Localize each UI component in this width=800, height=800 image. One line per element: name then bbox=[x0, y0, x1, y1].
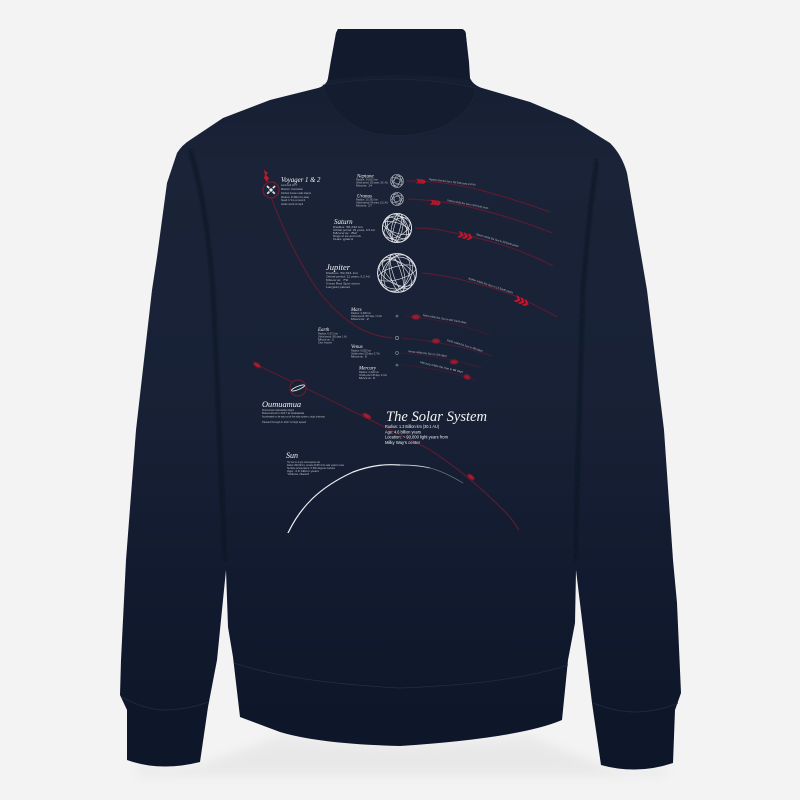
planet: Neptune bbox=[356, 173, 476, 189]
orbit caption: Mercury: Mercury orbits the Sun in 88 days bbox=[420, 360, 464, 374]
orbit caption: Earth: Earth orbits the Sun in 365 days bbox=[447, 338, 484, 353]
text: Saturn: Moons: 82 bbox=[333, 231, 358, 235]
text: Mercury: Radius: 2,440 km bbox=[359, 370, 380, 374]
text: Voyager: Farthest human-made objects bbox=[281, 191, 312, 195]
text: Jupiter: Moons: 79 bbox=[326, 278, 349, 282]
icon: Oumuamua bbox=[290, 380, 306, 396]
text: Jupiter bbox=[326, 262, 370, 289]
planet: Earth bbox=[317, 328, 484, 353]
text: Oumuamua: Discovered in 2017 at Haleakala bbox=[262, 411, 305, 415]
title: The Solar System bbox=[386, 409, 487, 425]
text: Voyager: Speed: 17 km per second bbox=[281, 198, 305, 202]
planet: Saturn bbox=[333, 210, 520, 248]
red arrow: Venus bbox=[450, 360, 458, 364]
text: Mercury bbox=[358, 366, 387, 380]
icon: Venus dot bbox=[396, 352, 398, 354]
text: Mars: Orbital period: 687 days, 1.5 AU bbox=[351, 314, 382, 318]
text: Earth: Orbital period: 365 days, 1 AU bbox=[318, 334, 347, 338]
text: Jupiter: Jupiter bbox=[326, 262, 351, 272]
icon: Earth dot bbox=[395, 336, 399, 340]
planet: Mercury bbox=[358, 360, 471, 380]
text: Sun: Yellow dwarf bbox=[287, 472, 309, 476]
text: Venus: Moons: 0 bbox=[351, 354, 368, 358]
text: Oumuamua: First known interstellar object bbox=[262, 408, 294, 412]
text: Neptune bbox=[356, 174, 388, 188]
text: Sun: Radius: 696,340 km, contains 99.8% of the solar system's mass bbox=[287, 463, 344, 467]
text: Earth: Moons: 1 bbox=[318, 338, 335, 342]
facts: Location: ~ 90,000 light years from bbox=[385, 434, 448, 440]
text: Uranus: Orbital period: 84 years, 19.2 AU bbox=[356, 200, 388, 204]
text: Uranus: Moons: 27 bbox=[356, 204, 373, 208]
text: Mercury: Orbital period: 88 days, 0.4 AU bbox=[359, 373, 387, 377]
icon: Voyager probe bbox=[263, 170, 279, 198]
text: Mars bbox=[350, 308, 382, 321]
red arrow: Uranus bbox=[430, 200, 441, 206]
sweatshirt bbox=[120, 29, 681, 776]
text: Uranus: Uranus bbox=[357, 194, 372, 200]
text: Neptune: Moons: 14 bbox=[356, 184, 373, 188]
text: Saturn: Radius: 58,232 km bbox=[333, 225, 364, 229]
planet: Venus bbox=[351, 345, 458, 364]
text: Oumuamua: Passed through in 2017 at high speed bbox=[262, 420, 306, 424]
text: Oumuamua: Accelerated on its way out of the solar system, origin unknown bbox=[262, 414, 325, 418]
facts: Radius: 1.3 Billion km (30.1 AU) bbox=[385, 424, 439, 429]
planet: Uranus bbox=[356, 191, 489, 210]
text: Jupiter: Great Red Spot storm bbox=[326, 282, 361, 286]
Oumuamua trajectory bbox=[253, 361, 519, 530]
text: Venus bbox=[351, 345, 380, 358]
text: Earth: Earth bbox=[317, 328, 330, 333]
hem seam bbox=[234, 663, 568, 688]
orbit caption: Jupiter: Jupiter orbits the Sun in 12 Earth years bbox=[468, 276, 514, 295]
Sun arc bbox=[288, 465, 463, 533]
icon: Saturn globe bbox=[380, 210, 414, 246]
text: Voyager: Mission: Interstellar bbox=[281, 187, 303, 191]
title block bbox=[385, 409, 487, 445]
red arrow: Earth bbox=[432, 339, 440, 343]
text: Saturn: Saturn bbox=[334, 218, 353, 226]
facts bbox=[385, 424, 448, 445]
orbit caption: Venus: Venus orbits the Sun in 225 days bbox=[408, 349, 448, 358]
text: Voyager: Launched 1977 bbox=[281, 183, 297, 187]
text: Earth bbox=[317, 328, 347, 344]
text: Voyager: Voyager 1 & 2 bbox=[281, 177, 321, 184]
text: Venus: Venus bbox=[351, 345, 363, 350]
text: Oumuamua bbox=[262, 400, 325, 424]
text: Oumuamua: Oumuamua bbox=[262, 400, 301, 409]
text: Jupiter: Largest planet bbox=[326, 285, 350, 289]
collar bbox=[328, 29, 470, 80]
orbit caption: Saturn: Saturn orbits the Sun in 29 Earth years bbox=[476, 232, 520, 248]
facts: Age: 4.6 billion years bbox=[385, 430, 422, 434]
text: Neptune: Radius: 24,622 km bbox=[356, 178, 379, 182]
artwork bbox=[253, 170, 557, 533]
text: Neptune: Orbital period: 165 years, 30.1 AU bbox=[356, 180, 388, 184]
text: Sun: The Sun is a G-type main-sequence star bbox=[287, 460, 320, 464]
orbit caption: Uranus: Uranus orbits the Sun in 84 Earth years bbox=[447, 198, 489, 210]
text: Mercury: Moons: 0 bbox=[359, 376, 376, 380]
text: Mars: Mars bbox=[350, 308, 362, 313]
icon: Voyager arrow bbox=[264, 170, 269, 182]
red arrow: Mars bbox=[412, 315, 420, 319]
text: Voyager bbox=[281, 177, 321, 206]
red arrows: Oumuamua path bbox=[253, 361, 261, 369]
icon: Jupiter globe bbox=[375, 249, 419, 297]
text: Jupiter: Radius: 69,911 km bbox=[326, 271, 359, 275]
icon: Mars dot bbox=[396, 315, 398, 317]
text: Sun: Sun bbox=[286, 451, 298, 460]
text: Voyager: Golden record on board bbox=[281, 202, 303, 206]
text: Mercury: Mercury bbox=[358, 366, 377, 372]
text: Earth: Our home bbox=[318, 340, 333, 344]
text: Mars: Radius: 3,390 km bbox=[351, 311, 372, 315]
text: Sun: Surface temperature: 5,500 degrees Celsius bbox=[287, 466, 336, 470]
raglan seams bbox=[190, 150, 225, 560]
planet: Mars bbox=[350, 308, 467, 325]
icon: Uranus globe bbox=[390, 191, 404, 207]
facts: Milky Way's center bbox=[385, 440, 420, 445]
icon: Mercury dot bbox=[396, 364, 398, 366]
text: Mars: Moons: 2 bbox=[351, 317, 370, 321]
text: Venus: Radius: 6,052 km bbox=[351, 348, 372, 352]
text: Venus: Orbital period: 225 days, 0.7 AU bbox=[351, 352, 380, 356]
text: Saturn: Orbital period: 29 years, 9.5 AU bbox=[333, 228, 375, 232]
text: Earth: Radius: 6,371 km bbox=[318, 332, 339, 336]
cuff seams bbox=[122, 697, 678, 712]
icon: Neptune globe bbox=[390, 173, 404, 189]
text: Saturn: Gas giant bbox=[333, 237, 353, 241]
text: Voyager: Distance: 23 billion km away bbox=[281, 195, 310, 199]
orbit caption: Neptune: Neptune orbits the Sun in 165 Earth years at 30 AU bbox=[429, 177, 476, 187]
planet: Jupiter bbox=[326, 249, 530, 307]
red arrow: Mercury bbox=[463, 374, 471, 380]
text: Sun: Age: 4.6 billion years bbox=[287, 469, 320, 473]
text: Saturn: Rings of ice and rock bbox=[333, 234, 362, 238]
spacecraft trajectory bbox=[271, 197, 393, 338]
red arrow: Neptune bbox=[416, 179, 426, 184]
red arrow: Saturn bbox=[457, 231, 473, 241]
orbit lines bbox=[401, 181, 557, 380]
text: Neptune: Neptune bbox=[356, 174, 374, 180]
text: Sun bbox=[286, 451, 344, 476]
text: Jupiter: Orbital period: 12 years, 5.2 AU bbox=[326, 274, 370, 278]
text: Uranus: Radius: 25,362 km bbox=[356, 198, 379, 202]
back neck panel bbox=[323, 79, 476, 136]
text: Uranus bbox=[356, 194, 388, 208]
orbit caption: Mars: Mars orbits the Sun in 687 Earth days bbox=[423, 313, 467, 325]
red arrow: Jupiter bbox=[514, 295, 530, 307]
text: Saturn bbox=[333, 218, 375, 241]
